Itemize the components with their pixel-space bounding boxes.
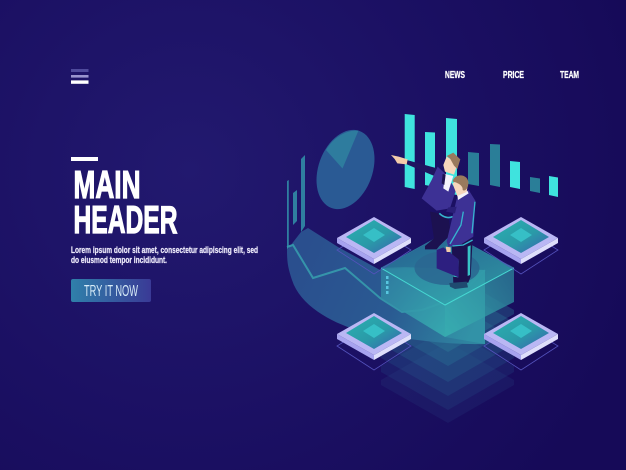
button: try it now: TRY IT NOW: [84, 283, 138, 300]
nav: price: PRICE: [503, 69, 524, 81]
nav: team: TEAM: [560, 69, 579, 81]
data ribbon with small bars: [287, 155, 485, 344]
title: MAIN: [74, 164, 140, 207]
nav: news: NEWS: [445, 69, 465, 81]
body text: Lorem ipsum dolor sit amet, consectetur adipiscing elit, sed: [71, 245, 258, 255]
reflection layers below platform: [381, 272, 514, 423]
man pointing: [391, 153, 460, 249]
bar chart: [405, 114, 558, 197]
body text: do eiusmod tempor incididunt.: [71, 255, 167, 265]
chip: bottom right: [484, 313, 558, 370]
man with briefcase: [437, 175, 475, 289]
menu icon: [71, 69, 88, 84]
chip: top right: [484, 217, 558, 274]
heading accent bar: [71, 157, 98, 161]
pie chart: [306, 122, 385, 217]
body text: [71, 245, 258, 265]
platform: [381, 232, 514, 344]
title: [74, 164, 178, 242]
chip: bottom left: [337, 313, 411, 370]
title: HEADER: [74, 199, 178, 242]
business people: [391, 153, 475, 289]
chip: top left: [337, 217, 411, 274]
button: try it now: [71, 279, 151, 302]
